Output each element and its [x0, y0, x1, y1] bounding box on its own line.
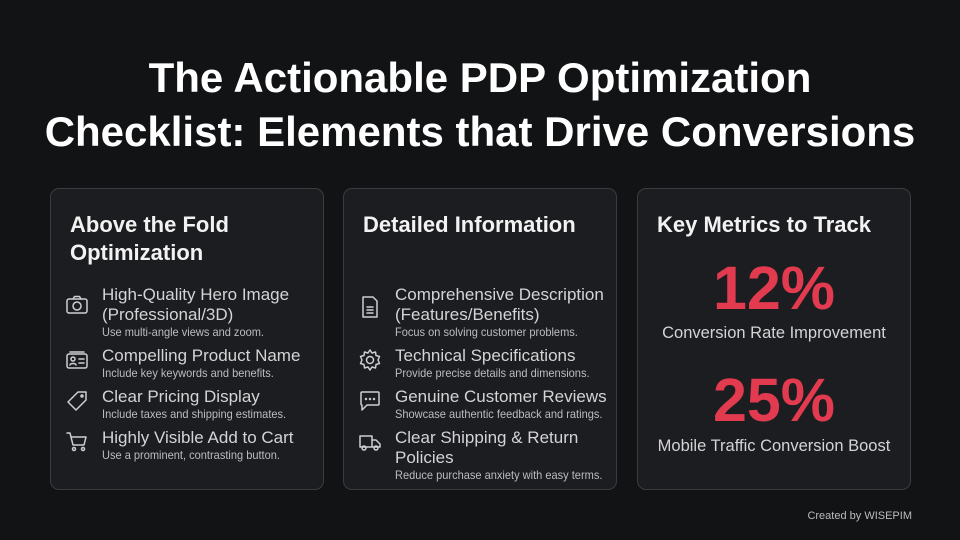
panel: detailed information: (Features/Benefits)	[395, 305, 540, 324]
panel: above the fold: Highly Visible Add to Cart	[102, 428, 294, 447]
panel: key metrics	[637, 188, 911, 490]
label: mobile: Mobile Traffic Conversion Boost	[658, 437, 890, 455]
panel: detailed information: Showcase authentic feedback and ratings.	[395, 407, 602, 421]
heading: Detailed Information	[363, 212, 576, 237]
label: conversion rate: Conversion Rate Improvement	[662, 324, 886, 342]
icon: gear	[360, 349, 380, 371]
panel: above the fold: Include key keywords and benefits.	[102, 366, 274, 380]
panel: above the fold: Clear Pricing Display	[102, 387, 260, 406]
metric: 12%: 12%	[713, 254, 835, 322]
item: product name	[66, 346, 300, 380]
icon: truck	[359, 435, 381, 451]
item: specs	[360, 346, 590, 380]
item: shipping	[359, 428, 602, 482]
panel: above the fold: (Professional/3D)	[102, 305, 233, 324]
title: The Actionable PDP Optimization	[149, 54, 811, 101]
title: Checklist: Elements that Drive Conversions	[45, 108, 915, 155]
heading: Above the Fold	[70, 212, 229, 237]
footer credit: Created by WISEPIM	[807, 510, 912, 522]
item: pricing	[67, 387, 286, 421]
panel: detailed information: Genuine Customer Reviews	[395, 387, 607, 406]
icon: camera	[66, 296, 88, 314]
heading: Optimization	[70, 240, 203, 265]
panel: above the fold: Compelling Product Name	[102, 346, 300, 365]
panel: detailed information: Provide precise details and dimensions.	[395, 366, 590, 380]
icon: cart	[66, 432, 87, 452]
panel: above the fold: Use multi-angle views and zoom.	[102, 325, 264, 339]
panel: above the fold	[50, 188, 324, 490]
panel: detailed information: Reduce purchase anxiety with easy terms.	[395, 468, 602, 482]
icon: tag	[67, 391, 87, 411]
item: description	[362, 285, 604, 339]
icon: document	[362, 296, 378, 318]
item: add to cart	[66, 428, 294, 462]
panel: above the fold: Use a prominent, contrasting button.	[102, 448, 280, 462]
heading	[70, 212, 229, 265]
heading: Key Metrics to Track	[657, 212, 871, 237]
icon: id card	[66, 351, 88, 369]
title	[45, 54, 915, 155]
panel: detailed information: Focus on solving customer problems.	[395, 325, 578, 339]
panel: above the fold: High-Quality Hero Image	[102, 285, 289, 304]
item: reviews	[360, 387, 607, 421]
panel: detailed information: Clear Shipping & Return	[395, 428, 578, 447]
panel: detailed information	[343, 188, 617, 490]
panel: detailed information: Technical Specifications	[395, 346, 575, 365]
metric: 25%: 25%	[713, 366, 835, 434]
panel: detailed information: Comprehensive Description	[395, 285, 604, 304]
item: hero image	[66, 285, 289, 339]
panel: above the fold: Include taxes and shipping estimates.	[102, 407, 286, 421]
icon: chat	[360, 391, 380, 411]
panel: detailed information: Policies	[395, 448, 454, 467]
